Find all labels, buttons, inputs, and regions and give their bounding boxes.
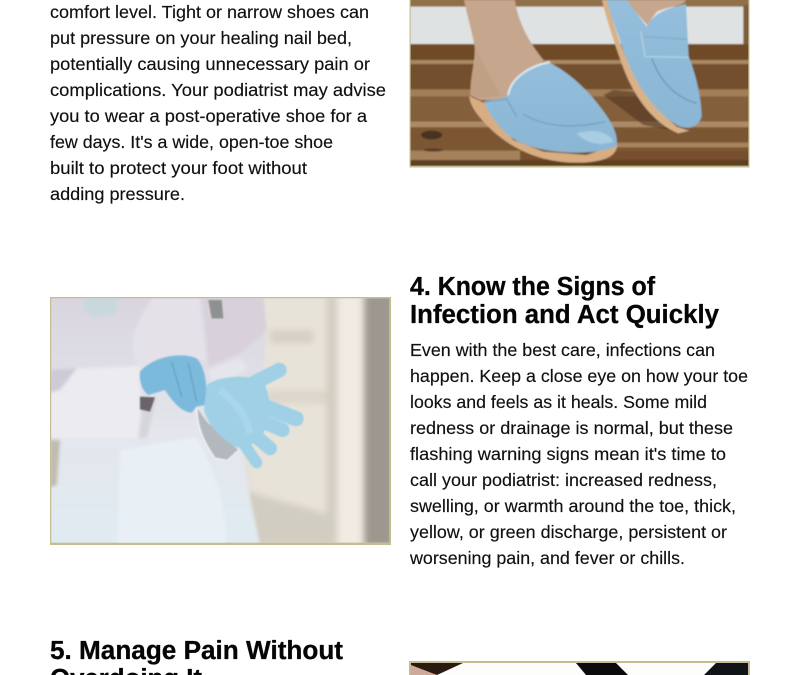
paragraph: shoe comfort advice: complications. Your podiatrist may advise [50, 80, 386, 100]
paragraph: signs of infection: flashing warning signs mean it's time to [410, 444, 726, 464]
paragraph: signs of infection: happen. Keep a close eye on how your toe [410, 366, 748, 386]
glove: gripping hand [140, 355, 206, 413]
paragraph: shoe comfort advice: few days. It's a wide, open-toe shoe [50, 132, 333, 152]
right shoe [607, 0, 702, 128]
left shoe sole [469, 96, 617, 163]
paragraph: signs of infection: looks and feels as it heals. Some mild [410, 392, 707, 412]
paragraph: shoe comfort advice: adding pressure. [50, 184, 185, 204]
glove cuff [197, 407, 238, 461]
left shoe [484, 61, 617, 153]
paragraph: signs of infection: worsening pain, and fever or chills. [409, 548, 685, 568]
paragraph: shoe comfort advice: built to protect your foot without [50, 158, 307, 178]
paragraph: signs of infection: call your podiatrist: increased redness, [410, 470, 717, 490]
paragraph: shoe comfort advice: potentially causing unnecessary pain or [50, 54, 370, 74]
paragraph: signs of infection: yellow, or green discharge, persistent or [410, 522, 727, 542]
paragraph: shoe comfort advice: you to wear a post-operative shoe for a [50, 106, 367, 126]
paragraph: signs of infection [409, 340, 748, 568]
heading: section 5: 5. Manage Pain Without [50, 637, 344, 665]
paragraph: signs of infection: redness or drainage is normal, but these [410, 418, 733, 438]
paragraph: shoe comfort advice: comfort level. Tight or narrow shoes can [50, 2, 369, 22]
paragraph: shoe comfort advice: put pressure on your healing nail bed, [50, 28, 352, 48]
paragraph: signs of infection: swelling, or warmth around the toe, thick, [410, 496, 736, 516]
photo: doctor in white coat putting on blue gloves [47, 293, 394, 547]
photo: top edge of next image, cropped [409, 661, 750, 675]
heading: section 4 [410, 273, 720, 329]
paragraph: shoe comfort advice [50, 2, 386, 204]
photo: feet in blue open-back shoes on wooden steps [407, 0, 753, 168]
right shoe sole [602, 0, 689, 133]
heading: section 4: Infection and Act Quickly [410, 301, 720, 329]
heading: section 4: 4. Know the Signs of [410, 273, 655, 301]
glove: open hand fingers and palm [240, 370, 296, 463]
right leg [627, 0, 686, 25]
left leg [464, 0, 544, 100]
paragraph: signs of infection: Even with the best care, infections can [410, 340, 715, 360]
